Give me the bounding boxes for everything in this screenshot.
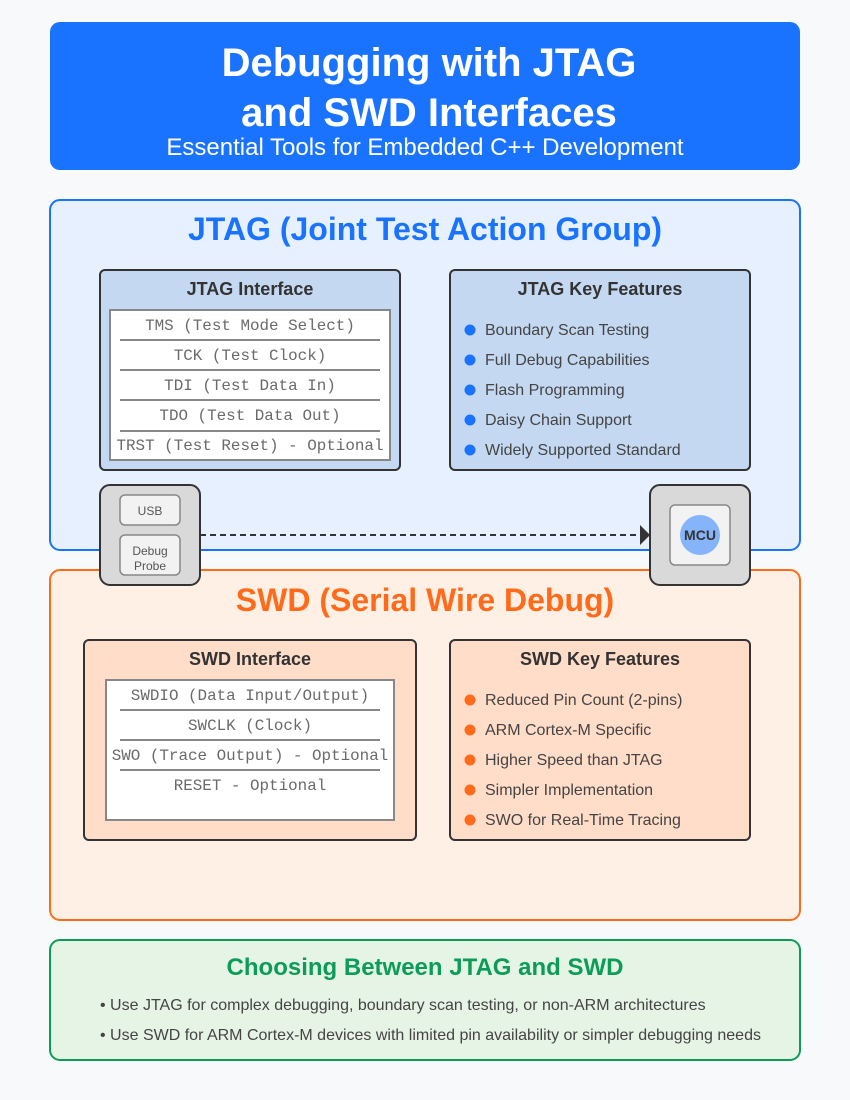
panel: SWD — [50, 570, 800, 920]
JTAG feature list: Daisy Chain Support — [485, 412, 632, 429]
panel: JTAG — [50, 200, 800, 550]
panel: choosing between JTAG and SWD — [50, 940, 800, 1060]
JTAG key features box: JTAG Key Features — [518, 279, 682, 299]
SWD feature list: Reduced Pin Count (2-pins) — [485, 692, 682, 709]
SWD feature list: SWO for Real-Time Tracing — [485, 812, 681, 829]
SWD feature list: Simpler Implementation — [485, 782, 653, 799]
JTAG feature list: Boundary Scan Testing — [485, 322, 649, 339]
SWD pin list — [106, 680, 394, 820]
subtitle: Essential Tools for Embedded C++ Development — [166, 134, 684, 161]
SWD heading: SWD (Serial Wire Debug) — [236, 582, 614, 618]
recommendation: JTAG: • Use JTAG for complex debugging, boundary scan testing, or non-ARM architectures — [100, 997, 706, 1014]
comparison heading: Choosing Between JTAG and SWD — [227, 954, 623, 981]
JTAG feature list: Full Debug Capabilities — [485, 352, 650, 369]
JTAG pin list: TDO (Test Data Out) — [159, 407, 341, 425]
title: and SWD Interfaces — [241, 91, 617, 135]
JTAG heading: JTAG (Joint Test Action Group) — [188, 211, 662, 247]
JTAG interface box: JTAG Interface — [187, 279, 313, 299]
SWD feature list: ARM Cortex-M Specific — [485, 722, 651, 739]
JTAG pin list: TRST (Test Reset) - Optional — [116, 437, 384, 455]
header banner — [50, 22, 800, 170]
SWD key features box: SWD Key Features — [520, 649, 680, 669]
probe label: Debug — [132, 544, 168, 558]
JTAG feature list — [464, 322, 681, 459]
SWD pin list: SWO (Trace Output) - Optional — [112, 747, 388, 765]
JTAG interface box — [100, 270, 400, 470]
SWD feature list — [464, 692, 682, 829]
probe label — [120, 535, 180, 575]
SWD interface box: SWD Interface — [189, 649, 311, 669]
SWD key features box — [450, 640, 750, 840]
JTAG pin list: TDI (Test Data In) — [164, 377, 336, 395]
USB port: USB — [138, 504, 162, 518]
SWD pin list: RESET - Optional — [174, 777, 326, 795]
SWD interface box — [84, 640, 416, 840]
JTAG pin list: TMS (Test Mode Select) — [145, 317, 355, 335]
SWD feature list: Higher Speed than JTAG — [485, 752, 663, 769]
icon: MCU: MCU — [684, 527, 716, 543]
SWD pin list: SWCLK (Clock) — [188, 717, 312, 735]
JTAG pin list — [110, 310, 390, 460]
title: Debugging with JTAG — [222, 41, 636, 85]
recommendation: SWD: • Use SWD for ARM Cortex-M devices with limited pin availability or simpler debugging needs — [100, 1027, 761, 1044]
icon: MCU — [650, 485, 750, 585]
JTAG feature list: Flash Programming — [485, 382, 625, 399]
JTAG key features box — [450, 270, 750, 470]
arrow: debug probe to MCU — [200, 525, 650, 545]
icon: debug probe — [100, 485, 200, 585]
SWD pin list: SWDIO (Data Input/Output) — [131, 687, 369, 705]
JTAG pin list: TCK (Test Clock) — [174, 347, 326, 365]
JTAG feature list: Widely Supported Standard — [485, 442, 681, 459]
probe label: Probe — [134, 559, 166, 573]
